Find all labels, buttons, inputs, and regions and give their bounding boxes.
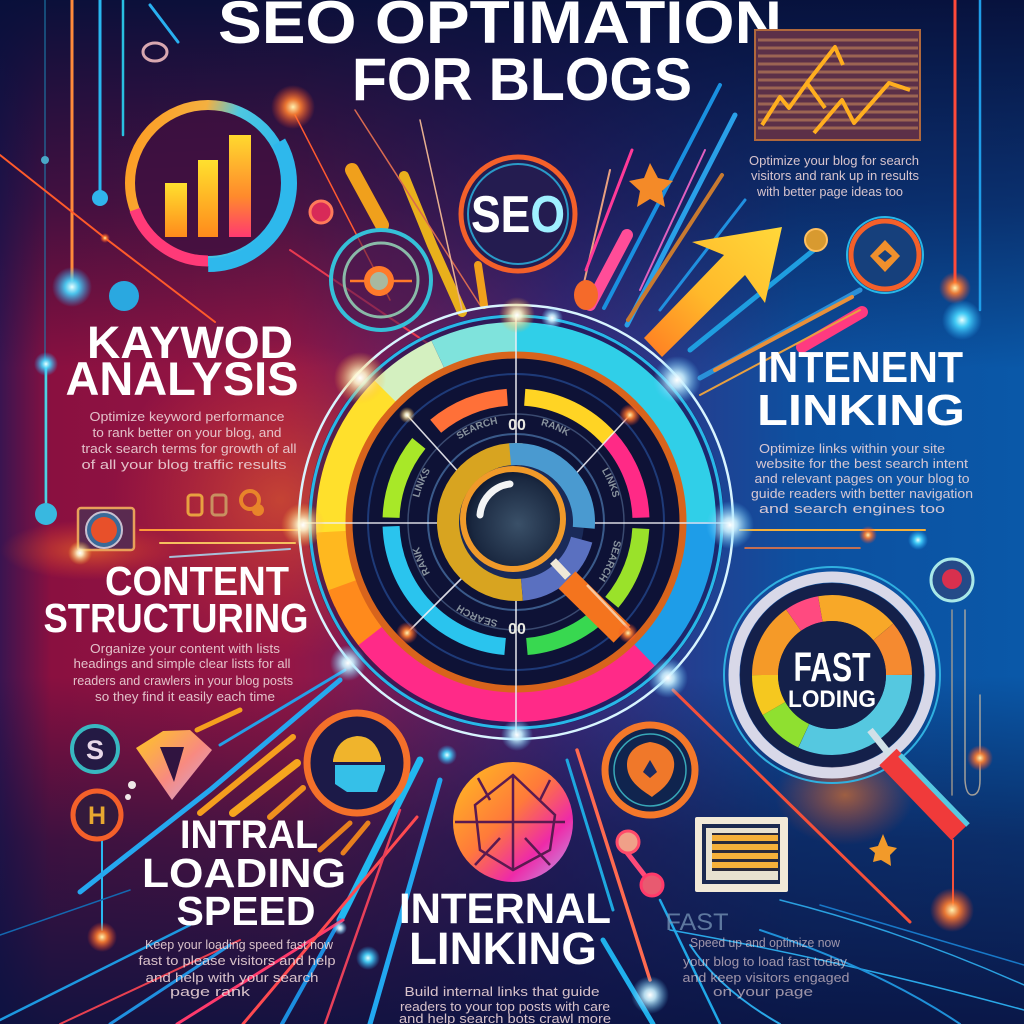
magnifier handle — [567, 580, 622, 634]
dial segments — [339, 345, 693, 699]
text block: bottom right description: your blog to load fast today — [683, 955, 848, 969]
magnifier lens — [463, 469, 563, 569]
heading: internal linking: LINKING — [409, 923, 597, 974]
dial small labels: SEARCH — [456, 604, 498, 627]
text block: loading speed description: and help with your search — [146, 971, 319, 985]
spoke lines — [303, 315, 730, 735]
text block: bottom right description: Speed up and optimize now — [690, 936, 841, 950]
title — [218, 0, 782, 113]
title: FOR BLOGS — [352, 46, 692, 113]
text block: intenent linking description: and search engines too — [759, 502, 945, 516]
icon: H coin badge: H — [88, 802, 106, 830]
text block: internal linking description: readers to your top posts with care — [400, 1000, 610, 1014]
icon: star — [629, 163, 673, 207]
heading: keyword analysis — [66, 317, 298, 405]
icon: D shield — [136, 730, 212, 800]
dial tick labels: 00 — [508, 417, 526, 434]
icon: H coin badge — [73, 791, 121, 839]
icon: rising arrow — [644, 227, 782, 357]
icon: small red target — [931, 559, 973, 601]
text block: intenent linking description: guide readers with better navigation — [751, 487, 973, 501]
icon: small gold star — [869, 834, 897, 866]
heading: intenent linking: INTENENT — [757, 343, 963, 392]
central SEO wheel: 00 — [508, 621, 526, 638]
text block: top right description: visitors and rank up in results — [751, 169, 919, 183]
icon: small pink nodes — [617, 831, 663, 896]
icon: document panel — [695, 817, 788, 892]
text block: bottom right description: and keep visitors engaged — [682, 971, 850, 985]
radial light streaks above the wheel — [290, 85, 862, 395]
icon: link globe — [453, 762, 573, 882]
heading: internal linking — [399, 885, 611, 974]
icon: fast loading gauge: FAST — [794, 644, 870, 690]
text block: intenent linking description: website for the best search intent — [755, 457, 969, 471]
text block: keyword analysis description — [82, 410, 296, 472]
outer thin ring — [308, 314, 724, 730]
text block: keyword analysis description: of all your blog traffic results — [82, 458, 286, 472]
icon: S badge — [72, 726, 118, 772]
icon: content frame — [78, 508, 134, 550]
icon: small red ring — [310, 201, 332, 223]
text block: top right description: Optimize your blog for search — [749, 154, 919, 168]
text block: intenent linking description — [751, 442, 973, 516]
small icons under keyword text — [188, 491, 264, 516]
radial light streaks below the wheel — [0, 670, 1024, 1024]
heading: content structuring: STRUCTURING — [44, 595, 308, 641]
icon: orange compass badge — [605, 725, 695, 815]
text block: content structuring description: readers and crawlers in your blog posts — [73, 674, 293, 688]
icon: growth chart — [755, 30, 920, 140]
heading: intral loading speed: LOADING — [142, 850, 346, 896]
text block: loading speed description: page rank — [170, 985, 251, 999]
heading: internal linking: INTERNAL — [399, 885, 611, 933]
icon: diamond badge — [847, 217, 923, 293]
icon: swirl badge — [143, 43, 167, 61]
icon: SEO badge: SEO — [471, 186, 565, 244]
text block: content structuring description: headings and simple clear lists for all — [74, 657, 290, 671]
icon: speed badge — [307, 713, 407, 813]
text block: keyword analysis description: to rank better on your blog, and — [92, 426, 282, 440]
central SEO wheel — [298, 304, 734, 740]
dial small labels: RANK — [412, 546, 430, 576]
icon: orange blob — [574, 280, 598, 310]
text block: bottom right description: on your page — [713, 985, 813, 999]
text block: keyword analysis description: Optimize keyword performance — [90, 410, 285, 424]
text block: keyword analysis description: track search terms for growth of all — [82, 442, 296, 456]
icon: SEO badge — [461, 157, 575, 271]
dial small labels: SEARCH — [456, 417, 498, 439]
text block: content structuring description: so they find it easily each time — [95, 690, 275, 704]
faint label: fast: FAST — [666, 909, 729, 936]
dial small labels: LINKS — [602, 468, 620, 498]
thick colored ring — [254, 260, 778, 784]
text block: internal linking description: Build internal links that guide — [404, 985, 600, 999]
text block: internal linking description — [399, 985, 611, 1024]
heading: content structuring — [44, 558, 308, 641]
text block: loading speed description: Keep your loading speed fast now — [145, 938, 334, 952]
dial small labels — [412, 417, 621, 627]
text block: loading speed description: fast to please visitors and help — [138, 954, 336, 968]
heading: keyword analysis: ANALYSIS — [66, 352, 298, 405]
text block: intenent linking description: Optimize links within your site — [759, 442, 945, 456]
heading: intenent linking: LINKING — [757, 386, 965, 435]
heading: intral loading speed — [142, 813, 346, 934]
heading: intral loading speed: INTRAL — [180, 813, 318, 857]
orange inner ring — [349, 355, 683, 689]
icon: small gold coin — [805, 229, 827, 251]
icon: fast loading gauge: LODING — [788, 686, 876, 713]
icon: keyword bar chart — [96, 71, 320, 295]
text block: content structuring description: Organize your content with lists — [90, 642, 280, 656]
dial small labels: SEARCH — [598, 540, 621, 582]
dial small labels: LINKS — [412, 468, 430, 498]
icon: S badge: S — [86, 735, 104, 765]
text block: bottom right description — [682, 936, 850, 999]
text block: intenent linking description: and relevant pages on your blog to — [754, 472, 970, 486]
heading: keyword analysis: KAYWOD — [87, 317, 293, 368]
heading: intenent linking — [757, 343, 965, 435]
text block: top right description — [749, 154, 919, 199]
icon: radar dial — [331, 230, 431, 330]
dial small labels: RANK — [541, 418, 570, 436]
icon: fast loading gauge — [724, 567, 968, 832]
text block: top right description: with better page ideas too — [756, 185, 903, 199]
text block: loading speed description — [138, 938, 336, 999]
heading: intral loading speed: SPEED — [176, 888, 316, 934]
text block: content structuring description — [73, 642, 293, 704]
inner gold ring — [448, 454, 584, 590]
heading: content structuring: CONTENT — [105, 558, 289, 604]
